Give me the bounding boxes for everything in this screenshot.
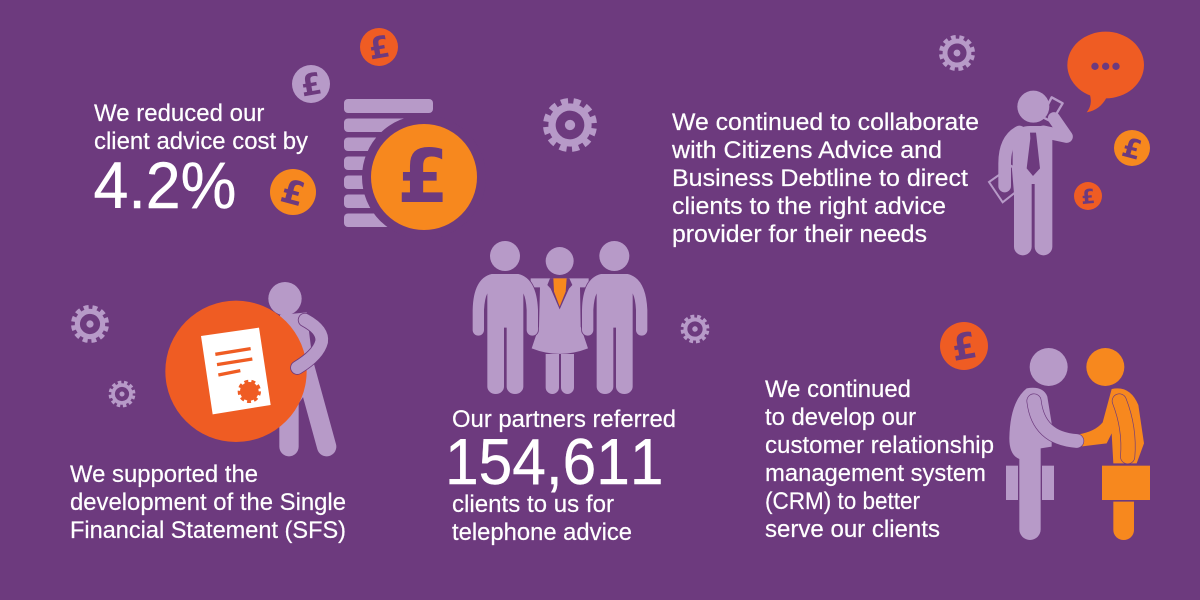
right man (582, 241, 647, 394)
speech bubble (1067, 32, 1144, 112)
lapels (547, 278, 572, 309)
text: CRM: (CRM) to better (765, 488, 920, 515)
text: single financial statement: development of the Single (70, 489, 346, 516)
icon: orange pound coin right (1114, 130, 1150, 167)
text: CRM: We continued (765, 376, 911, 403)
icon: three people (473, 241, 647, 394)
icon: red pound coin above handshake (940, 322, 988, 370)
icon: handshake (1006, 348, 1150, 540)
figure: 154,611: 154,611 (445, 426, 663, 498)
text: collaboration: clients to the right advice (672, 193, 946, 220)
text: collaboration: We continued to collaborate (672, 109, 979, 136)
certificate (201, 328, 271, 414)
phone (1042, 97, 1063, 122)
text: advice cost: client advice cost by (94, 128, 308, 155)
text: single financial statement: Financial Statement (SFS) (70, 517, 346, 544)
icon: red pound coin above handshake: £ (948, 325, 980, 370)
icon: gear centre right (681, 315, 709, 343)
icon: lilac pound coin (292, 65, 330, 105)
woman (531, 247, 589, 394)
icon: gear left lower (109, 381, 135, 407)
text: collaboration: Business Debtline to direct (672, 165, 968, 192)
lilac man (1006, 348, 1068, 540)
man figure (1005, 91, 1067, 255)
text: CRM: management system (765, 460, 986, 487)
text: single financial statement: We supported the (70, 461, 258, 488)
text: CRM: serve our clients (765, 516, 940, 543)
text: single financial statement (70, 461, 346, 544)
text: CRM: customer relationship (765, 432, 994, 459)
red circle (165, 301, 307, 442)
figure behind (268, 282, 327, 456)
tie (553, 278, 567, 307)
icon: red pound coin (360, 28, 398, 68)
clasped arm (1034, 401, 1077, 441)
text: partner referrals: telephone advice (452, 519, 632, 546)
text: CRM (765, 376, 994, 543)
icon: red pound coin right (1074, 182, 1102, 210)
left man (473, 241, 538, 394)
icon: red pound coin right: £ (1080, 184, 1096, 209)
icon: man holding certificate (165, 282, 327, 456)
icon: gear top right (939, 35, 975, 71)
orange man (1078, 348, 1150, 540)
icon: man on phone with speech bubble (989, 32, 1144, 255)
text: advice cost: We reduced our (94, 100, 264, 127)
icon: gear left upper (71, 305, 109, 343)
icon: orange pound coin (270, 169, 316, 215)
icon: lilac pound coin: £ (298, 66, 325, 105)
icon: gear top centre (543, 98, 597, 152)
text: collaboration: provider for their needs (672, 221, 927, 248)
icon: stack of coins with large pound coin: £ (397, 134, 449, 220)
arm (297, 320, 322, 368)
text: advice cost (94, 100, 308, 222)
icon: red pound coin: £ (366, 29, 393, 68)
text: CRM: to develop our (765, 404, 916, 431)
text: collaboration: with Citizens Advice and (671, 137, 942, 164)
figure: 4.2%: 4.2% (94, 149, 236, 222)
text: collaboration (671, 109, 979, 248)
icon: orange pound coin right: £ (1119, 132, 1145, 167)
text: partner referrals (445, 406, 676, 546)
clipboard (989, 166, 1026, 202)
icon: stack of coins with large pound coin (344, 99, 486, 239)
icon: orange pound coin: £ (277, 171, 309, 214)
text: partner referrals: Our partners referred (452, 406, 676, 433)
text: partner referrals: clients to us for (452, 491, 614, 518)
tie (1027, 133, 1040, 176)
